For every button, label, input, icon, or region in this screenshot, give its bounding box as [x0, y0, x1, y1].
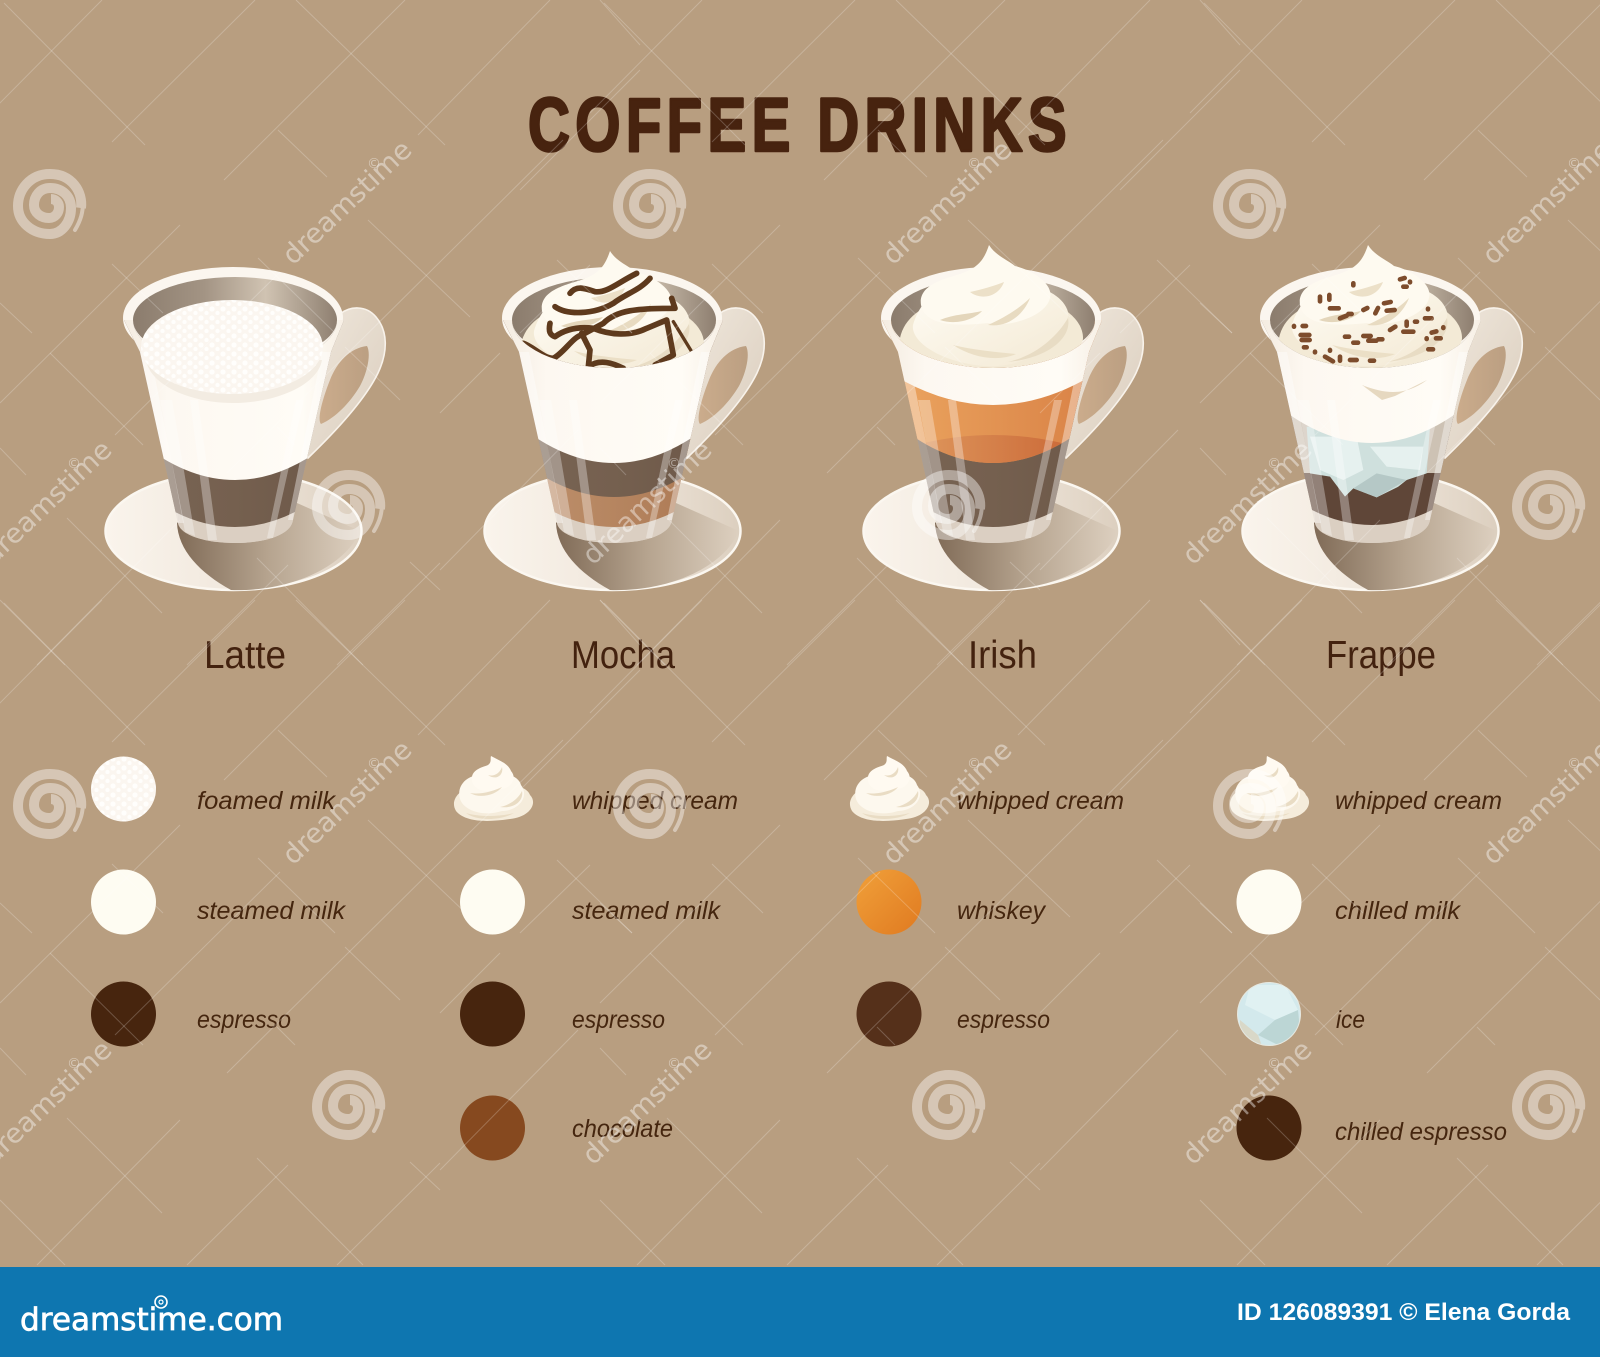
- icon: chocolate: [460, 1096, 525, 1160]
- legend: irish: [850, 756, 1124, 1046]
- icon: espresso: [460, 982, 525, 1046]
- legend: mocha: [454, 756, 738, 1160]
- text: dreamstime: [276, 134, 418, 271]
- icon: espresso: [856, 982, 922, 1046]
- legend: latte: [91, 756, 347, 1046]
- text: ©: [967, 756, 981, 772]
- footer logo: dreamstime.com: [20, 1302, 283, 1338]
- text: ©: [367, 156, 381, 172]
- text: dreamstime: [1176, 1034, 1318, 1171]
- text: dreamstime: [576, 434, 718, 571]
- icon: steamed milk: [91, 870, 156, 934]
- label: Latte: Latte: [204, 634, 286, 677]
- text: dreamstime: [876, 734, 1018, 871]
- footer bar: [0, 1267, 1600, 1357]
- panel: mocha cup: [479, 251, 764, 590]
- ice layer: [1307, 427, 1430, 497]
- text: whiskey: whiskey: [957, 897, 1046, 925]
- panel: frappe cup: [1237, 245, 1522, 590]
- label: Mocha: Mocha: [571, 634, 675, 677]
- text: whipped cream: whipped cream: [572, 787, 738, 815]
- icon: chilled espresso: [1236, 1096, 1302, 1160]
- footer credit: ID 126089391 © Elena Gorda: [1237, 1299, 1571, 1326]
- label: Irish: Irish: [968, 634, 1037, 677]
- icon: chilled milk: [1236, 870, 1302, 934]
- text: chilled espresso: chilled espresso: [1335, 1118, 1507, 1146]
- text: steamed milk: steamed milk: [572, 897, 722, 925]
- text: chilled milk: chilled milk: [1335, 897, 1462, 925]
- text: dreamstime: [876, 134, 1018, 271]
- text: ©: [1567, 756, 1581, 772]
- icon: espresso: [91, 982, 156, 1046]
- icon: whiskey: [856, 870, 922, 934]
- icon: steamed milk: [460, 870, 525, 934]
- text: ©: [367, 756, 381, 772]
- text: ©: [67, 456, 81, 472]
- text: espresso: espresso: [197, 1006, 291, 1034]
- panel: irish cup: [858, 245, 1143, 590]
- text: ©: [1267, 456, 1281, 472]
- text: ©: [967, 156, 981, 172]
- icon: whipped cream: [850, 756, 929, 821]
- text: ice: ice: [1336, 1006, 1365, 1034]
- text: dreamstime: [576, 1034, 718, 1171]
- text: ©: [1267, 1056, 1281, 1072]
- text: ©: [1567, 156, 1581, 172]
- chocolate drizzle: [523, 273, 692, 368]
- text: steamed milk: steamed milk: [197, 897, 347, 925]
- icon: whipped cream: [454, 756, 533, 821]
- text: foamed milk: foamed milk: [197, 787, 337, 815]
- icon: foamed milk: [91, 756, 156, 822]
- panel: latte cup: [100, 267, 385, 590]
- text: espresso: espresso: [957, 1006, 1050, 1034]
- text: ©: [667, 456, 681, 472]
- text: whipped cream: whipped cream: [1335, 787, 1502, 815]
- icon: whipped cream: [1230, 756, 1309, 821]
- chocolate sprinkles: [1294, 278, 1443, 361]
- text: ©: [667, 1056, 681, 1072]
- text: ©: [67, 1056, 81, 1072]
- legend: frappe: [1230, 756, 1507, 1160]
- text: whipped cream: whipped cream: [957, 787, 1124, 815]
- text: dreamstime: [1176, 434, 1318, 571]
- text: espresso: espresso: [572, 1006, 665, 1034]
- label: Frappe: Frappe: [1326, 634, 1436, 677]
- text: dreamstime: [276, 734, 418, 871]
- foam layer: [141, 300, 323, 403]
- title: COFFEE DRINKS: [528, 83, 1072, 168]
- icon: ice: [1236, 982, 1302, 1048]
- text: chocolate: chocolate: [572, 1115, 673, 1143]
